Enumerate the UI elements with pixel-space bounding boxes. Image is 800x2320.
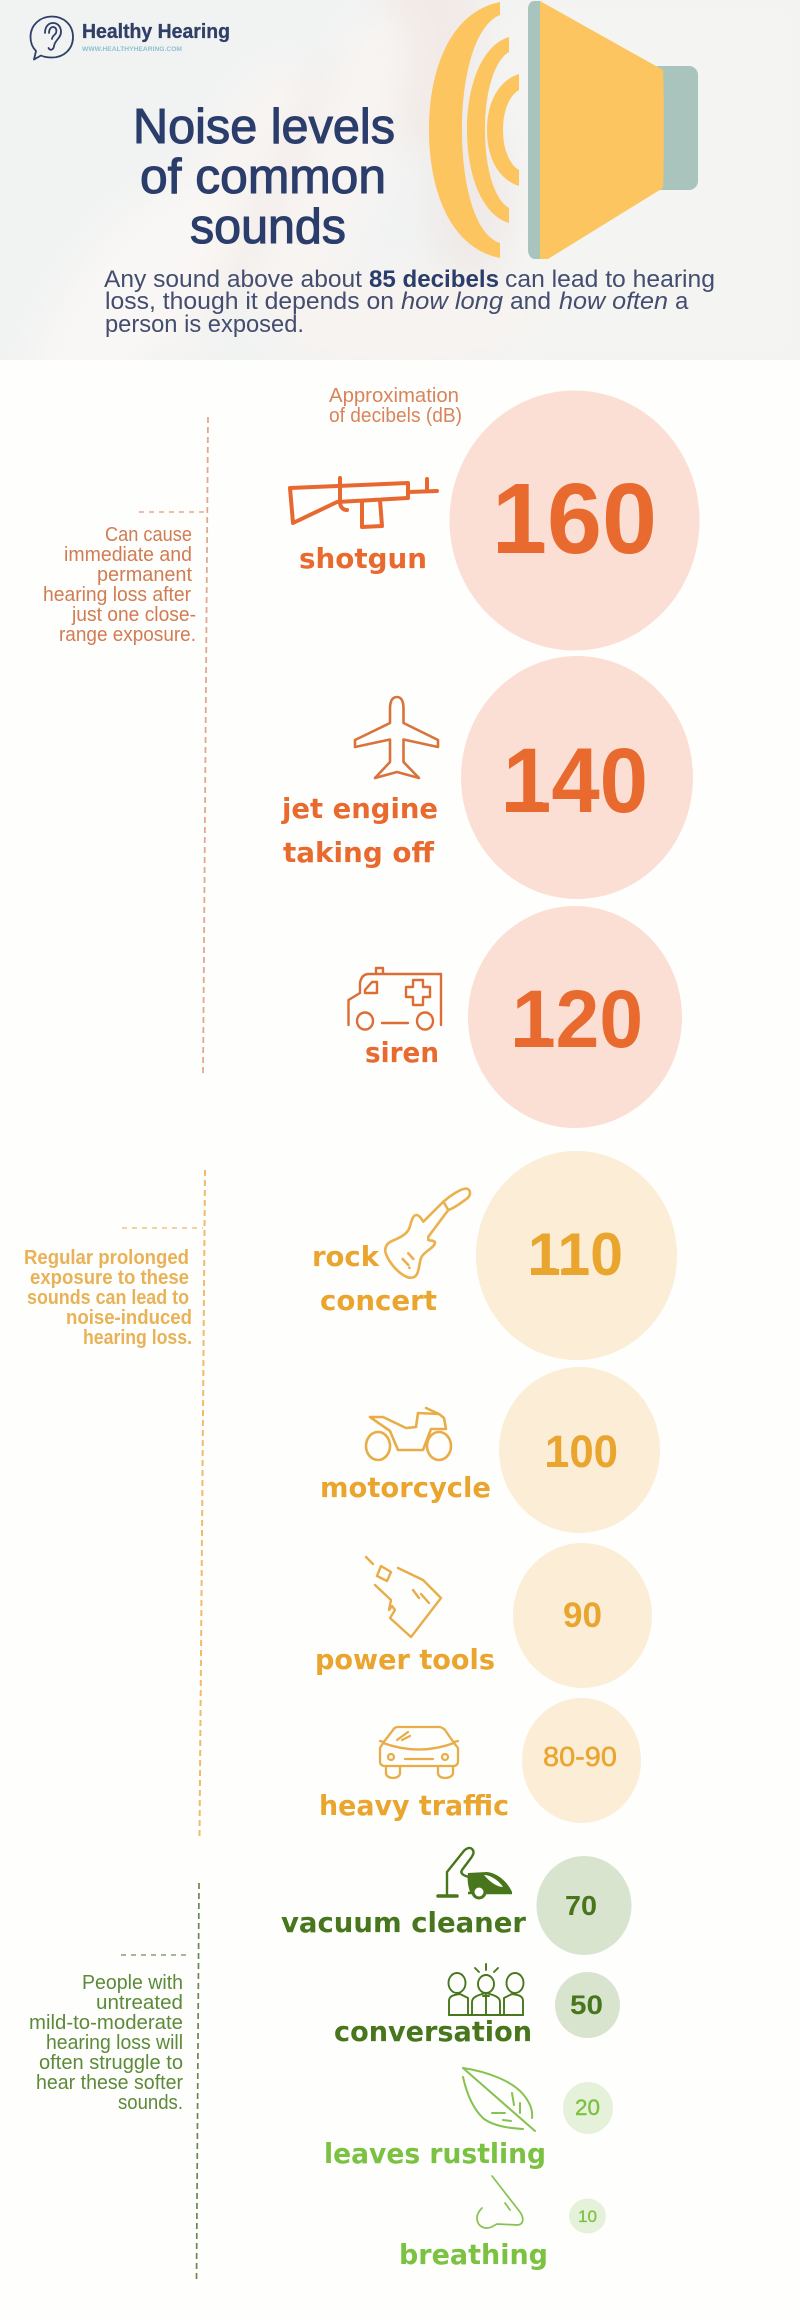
intro paragraph bbox=[104, 266, 715, 338]
logo wordmark: Healthy Hearing bbox=[82, 21, 230, 43]
icon: vacuum cleaner bbox=[438, 1848, 512, 1898]
logo: Healthy Hearing bbox=[30, 16, 230, 60]
circle 20 bbox=[563, 2082, 613, 2134]
circle 100 bbox=[499, 1367, 660, 1533]
side note: immediate damage: just one close- bbox=[71, 604, 196, 626]
item: motorcycle 100 bbox=[320, 1367, 660, 1533]
side note: softer sounds: untreated bbox=[96, 1992, 183, 2014]
number 70: 70 bbox=[565, 1890, 597, 1921]
icon: power drill bbox=[366, 1557, 441, 1637]
number 80-90: 80-90 bbox=[543, 1741, 617, 1772]
side note: softer sounds: sounds. bbox=[118, 2092, 183, 2114]
item: heavy traffic 80-90 bbox=[319, 1698, 641, 1823]
number 110: 110 bbox=[528, 1221, 623, 1288]
item: vacuum cleaner 70 bbox=[281, 1848, 632, 1955]
circle 140 bbox=[461, 656, 693, 899]
circle 10 bbox=[569, 2198, 606, 2234]
label power tools: power tools bbox=[315, 1643, 495, 1676]
panel: header bbox=[0, 0, 800, 360]
header photo background: blurred hand bbox=[0, 0, 800, 360]
side note: immediate damage: hearing loss after bbox=[43, 584, 191, 606]
side note: softer sounds bbox=[29, 1883, 199, 2279]
circle 90 bbox=[513, 1543, 652, 1688]
side note: immediate damage bbox=[43, 417, 208, 1077]
item: leaves rustling 20 bbox=[324, 2068, 613, 2170]
label shotgun: shotgun bbox=[299, 542, 427, 575]
side note: immediate damage: Can cause bbox=[105, 524, 192, 546]
item: conversation 50 bbox=[334, 1964, 620, 2048]
logo url: WWW.HEALTHYHEARING.COM bbox=[82, 47, 182, 53]
side note: softer sounds: often struggle to bbox=[39, 2052, 183, 2074]
title: sounds bbox=[190, 200, 346, 254]
number 10: 10 bbox=[578, 2207, 597, 2226]
caption: approximation of decibels bbox=[329, 385, 462, 427]
circle 70 bbox=[536, 1856, 632, 1955]
title: Noise levels bbox=[133, 100, 395, 154]
number 100: 100 bbox=[545, 1426, 618, 1477]
side note: prolonged exposure: sounds can lead to bbox=[27, 1287, 189, 1309]
label jet engine taking off: taking off bbox=[283, 836, 434, 869]
label leaves rustling: leaves rustling bbox=[324, 2137, 546, 2170]
icon: car bbox=[380, 1727, 458, 1778]
label rock concert bbox=[312, 1240, 437, 1317]
number 160: 160 bbox=[492, 463, 657, 575]
side note: softer sounds: hear these softer bbox=[36, 2072, 183, 2094]
icon: speaker bbox=[429, 1, 698, 259]
intro paragraph: Any sound above about bbox=[104, 266, 362, 293]
caption: approximation of decibels: Approximation bbox=[329, 385, 459, 407]
label jet engine taking off bbox=[281, 792, 438, 869]
label breathing: breathing bbox=[399, 2238, 548, 2271]
side note: prolonged exposure: exposure to these bbox=[30, 1267, 189, 1289]
intro paragraph: person is exposed. bbox=[105, 311, 304, 338]
item: rock concert 110 bbox=[312, 1151, 677, 1360]
number 90: 90 bbox=[563, 1596, 602, 1635]
circle 80-90 bbox=[522, 1698, 641, 1823]
caption: approximation of decibels: of decibels (dB) bbox=[329, 405, 462, 427]
item: shotgun 160 bbox=[290, 390, 700, 650]
item: breathing 10 bbox=[399, 2176, 606, 2271]
number 50: 50 bbox=[570, 1990, 603, 2020]
circle 110 bbox=[476, 1151, 677, 1360]
side note: prolonged exposure: hearing loss. bbox=[83, 1327, 192, 1349]
intro paragraph: can lead to hearing bbox=[505, 266, 715, 293]
label heavy traffic: heavy traffic bbox=[319, 1789, 509, 1822]
number 140: 140 bbox=[503, 730, 648, 832]
icon: ambulance bbox=[348, 968, 441, 1030]
item: jet engine 140 bbox=[281, 656, 693, 899]
icon: leaf bbox=[463, 2068, 535, 2131]
side note: immediate damage: permanent bbox=[97, 564, 192, 586]
label motorcycle: motorcycle bbox=[320, 1471, 491, 1504]
side note: prolonged exposure bbox=[24, 1170, 205, 1837]
icon: ear in speech bubble bbox=[30, 16, 73, 60]
intro paragraph: how often bbox=[559, 288, 668, 315]
side note: prolonged exposure: Regular prolonged bbox=[24, 1247, 189, 1269]
number 120: 120 bbox=[512, 974, 643, 1065]
side note: immediate damage: immediate and bbox=[64, 544, 192, 566]
label siren: siren bbox=[365, 1036, 439, 1069]
circle 120 bbox=[468, 906, 682, 1128]
icon: plane bbox=[355, 697, 438, 778]
intro paragraph: and bbox=[510, 288, 551, 315]
side note: softer sounds: People with bbox=[82, 1972, 183, 1994]
icon: conversation group bbox=[448, 1964, 524, 2015]
number 20: 20 bbox=[575, 2095, 600, 2120]
circle 160 bbox=[450, 390, 700, 650]
side note: softer sounds: hearing loss will bbox=[46, 2032, 183, 2054]
side note: immediate damage: range exposure. bbox=[59, 624, 196, 646]
intro paragraph: 85 decibels bbox=[369, 266, 499, 293]
label rock concert: rock bbox=[312, 1240, 380, 1273]
icon: guitar bbox=[385, 1188, 470, 1278]
circle 50 bbox=[555, 1972, 620, 2038]
icon: shotgun bbox=[290, 478, 437, 527]
icon: motorcycle bbox=[366, 1408, 451, 1460]
label conversation: conversation bbox=[334, 2015, 532, 2048]
title bbox=[133, 100, 395, 254]
label rock concert: concert bbox=[320, 1284, 437, 1317]
side note: prolonged exposure: noise-induced bbox=[66, 1307, 192, 1329]
label jet engine taking off: jet engine bbox=[281, 792, 438, 825]
label vacuum cleaner: vacuum cleaner bbox=[281, 1906, 526, 1939]
side note: softer sounds: mild-to-moderate bbox=[29, 2012, 183, 2034]
intro paragraph: a bbox=[675, 288, 689, 315]
item: siren 120 bbox=[348, 906, 682, 1128]
icon: nose bbox=[477, 2176, 523, 2228]
intro paragraph: loss, though it depends on bbox=[105, 288, 394, 315]
item: power tools 90 bbox=[315, 1543, 652, 1688]
intro paragraph: how long bbox=[401, 288, 504, 315]
title: of common bbox=[140, 150, 386, 204]
